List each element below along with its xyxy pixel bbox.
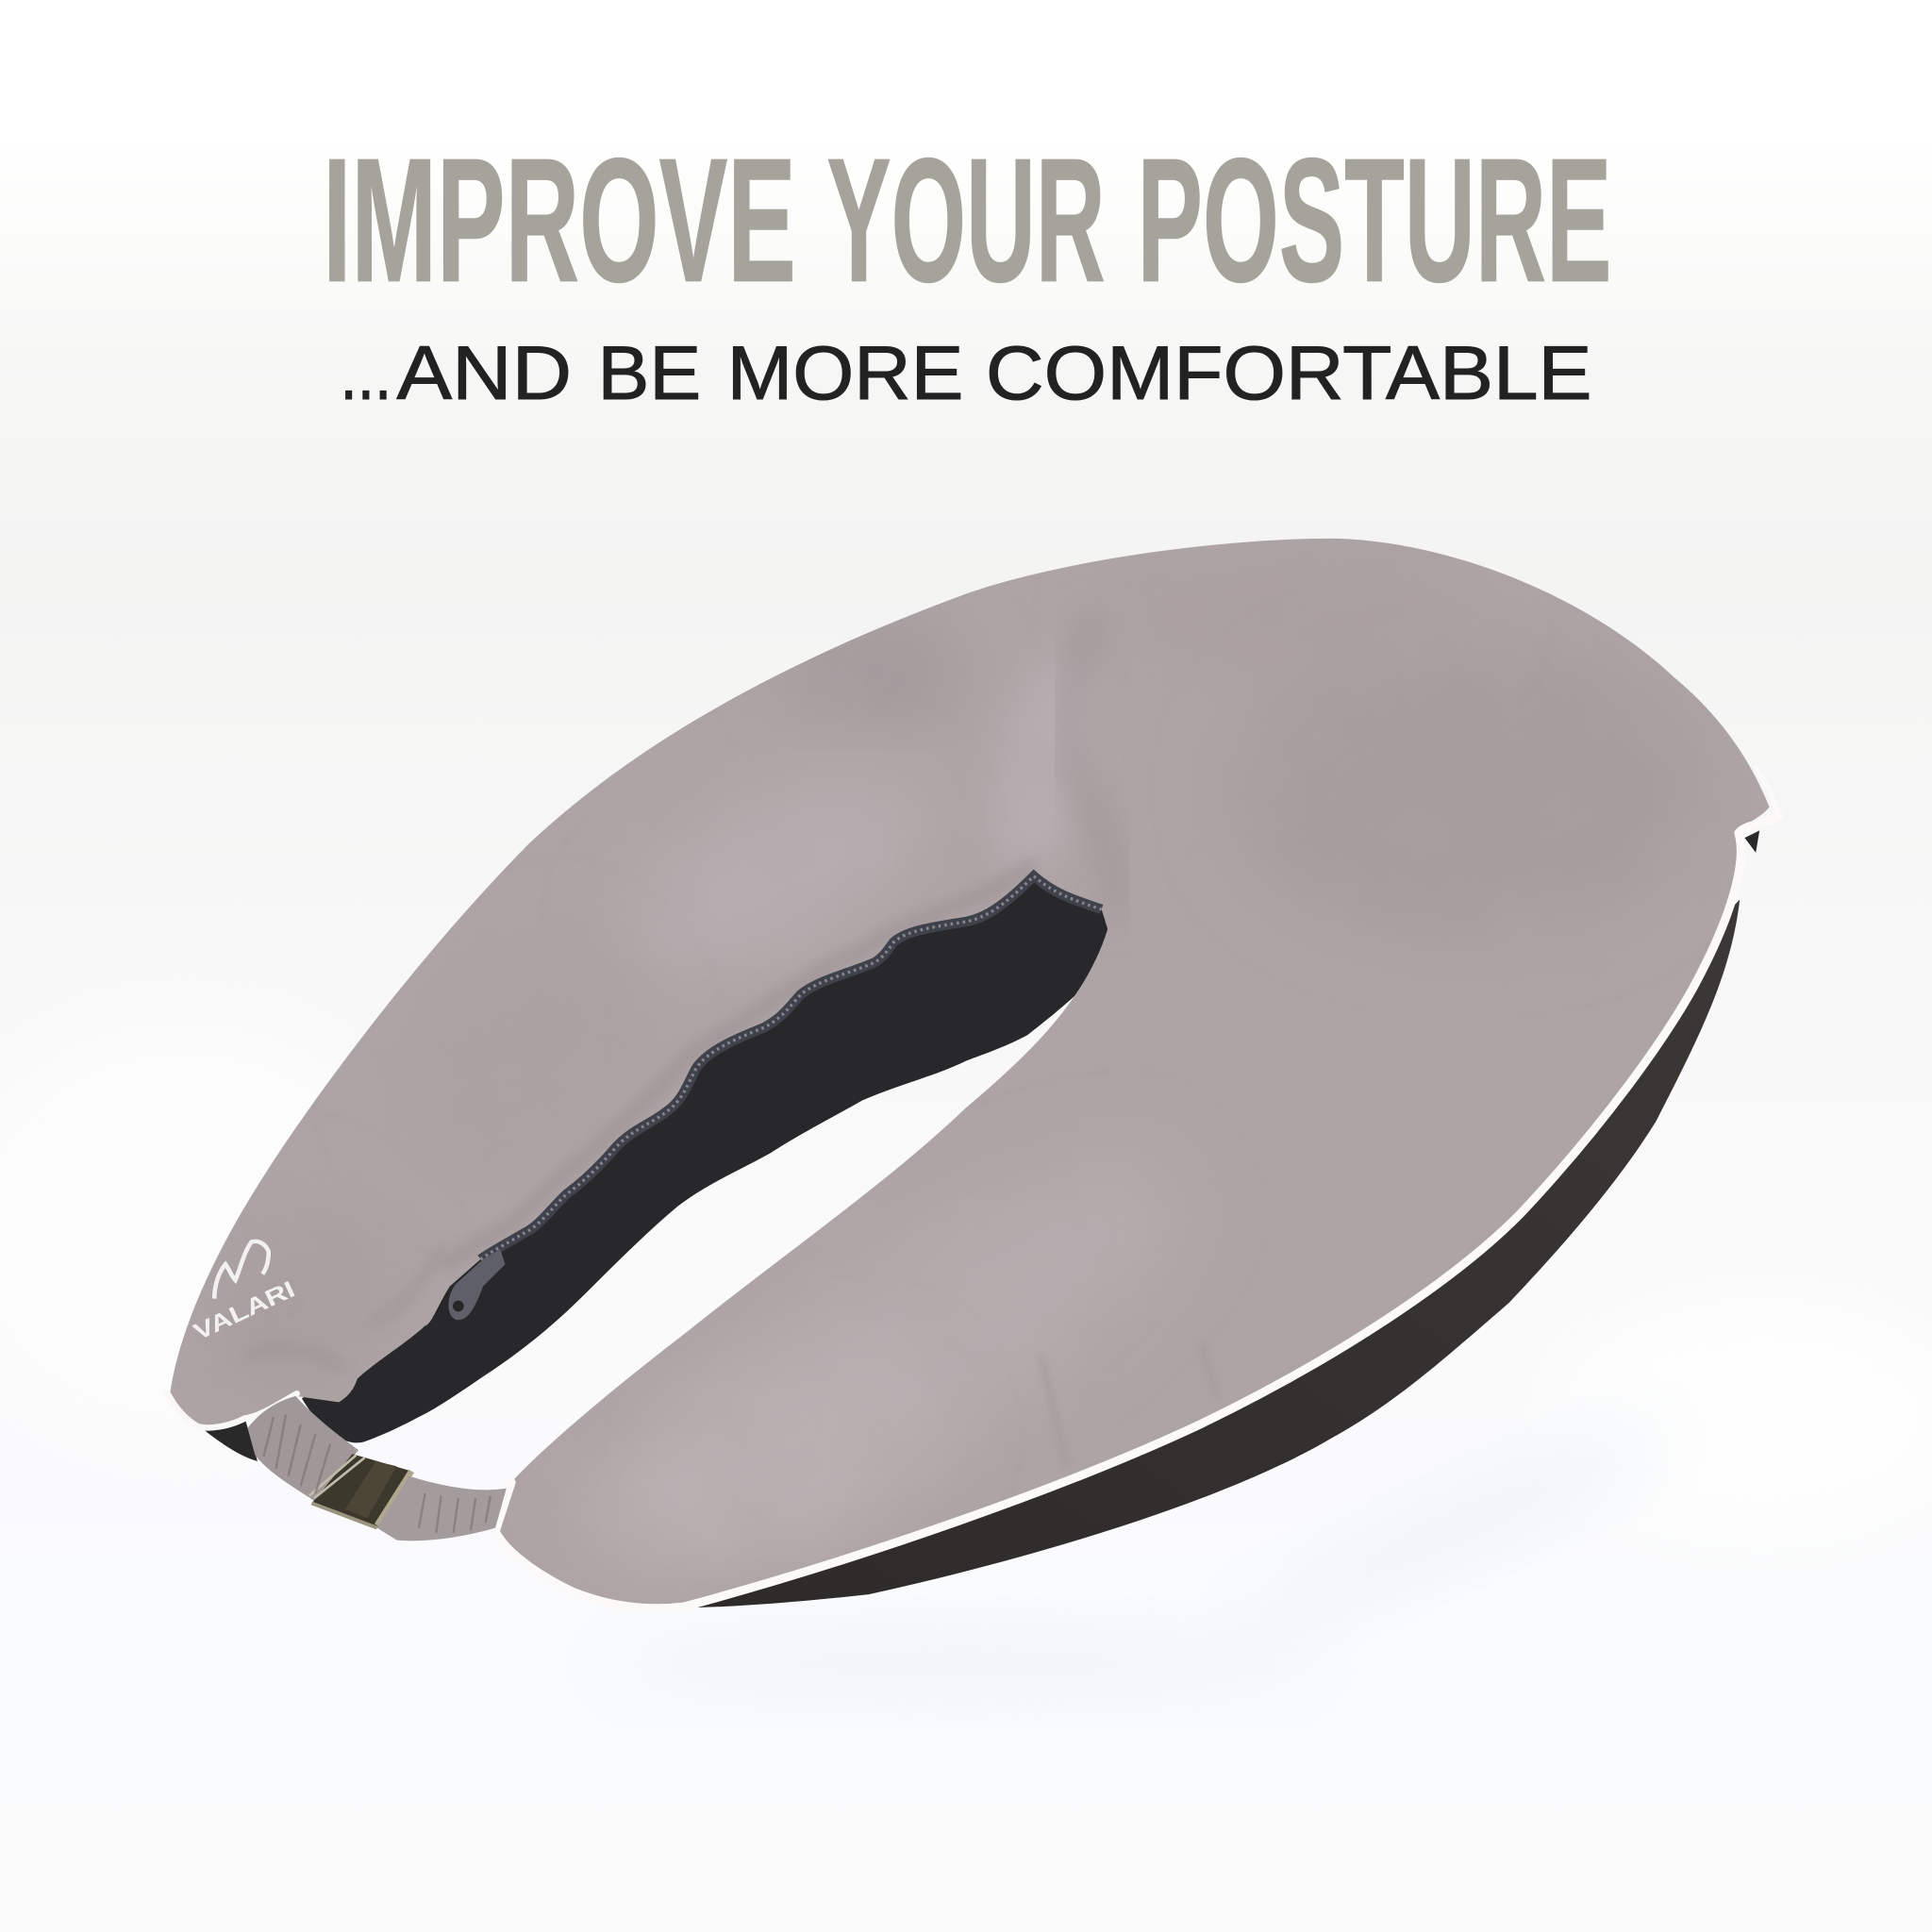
pillow <box>170 538 1770 1607</box>
buckle <box>309 1454 411 1528</box>
elastic strap right <box>377 1476 507 1541</box>
zipper <box>480 876 1102 1259</box>
fold between arms <box>1055 655 1092 811</box>
dark notch at right tip <box>1744 830 1759 853</box>
dark underside of right arm <box>684 899 1740 1607</box>
white left tip piping <box>168 1393 297 1427</box>
subtitle: BE <box>597 331 701 416</box>
white piping at right tip <box>1756 766 1779 816</box>
subtitle: COMFORTABLE <box>986 331 1592 416</box>
title: IMPROVE <box>323 122 796 319</box>
dark underside of left tip <box>204 1420 258 1461</box>
title <box>323 122 1611 319</box>
seam crease on right arm <box>1041 1343 1217 1466</box>
elastic strap left <box>248 1396 358 1501</box>
grey top fabric <box>170 538 1770 1604</box>
subtitle <box>340 331 1592 416</box>
white edge piping <box>495 816 1779 1608</box>
title: YOUR <box>826 122 1106 319</box>
dark underside of left arm <box>302 876 1108 1442</box>
logo wordmark: VALARI <box>190 1276 299 1345</box>
subtitle: MORE <box>727 331 963 416</box>
subtitle: ... <box>340 331 391 416</box>
logo heart mark <box>214 1241 269 1299</box>
subtitle: AND <box>397 331 572 416</box>
brand logo <box>190 1241 299 1345</box>
shading along zipper <box>443 862 1034 1269</box>
zipper puller <box>448 1249 506 1320</box>
strap gathers <box>264 1414 491 1533</box>
pucker near zipper end <box>246 1247 443 1368</box>
